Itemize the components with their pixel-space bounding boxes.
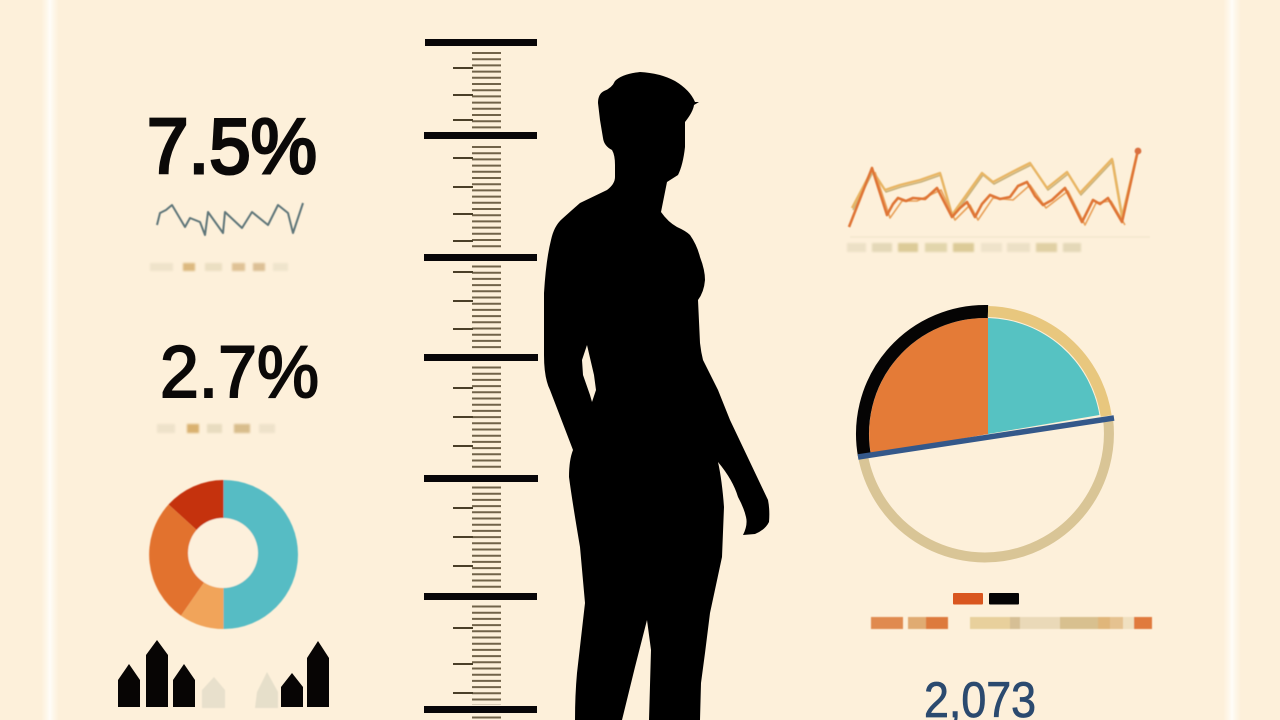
legend: blurred caption under 7.5% [150,263,288,271]
sparkline: grey-blue trend [157,203,303,235]
panel: right charts column [847,148,1152,720]
legend: orange and black swatches [953,593,1019,604]
human silhouette [544,72,769,720]
donut chart [149,480,298,629]
stat: 7.5%: 7.5% [147,102,317,190]
stat: 2.7%: 2.7% [160,332,319,413]
line chart: orange and tan series [849,148,1150,237]
legend: blurred caption under line chart [847,243,1081,252]
icon row: house-shaped bars [118,640,329,708]
panel: left statistics column [118,102,329,708]
legend: blurred caption under 2.7% [157,424,275,433]
pie chart [858,311,1114,557]
height ruler [424,39,538,720]
legend: blurred caption under swatches [871,617,1152,629]
